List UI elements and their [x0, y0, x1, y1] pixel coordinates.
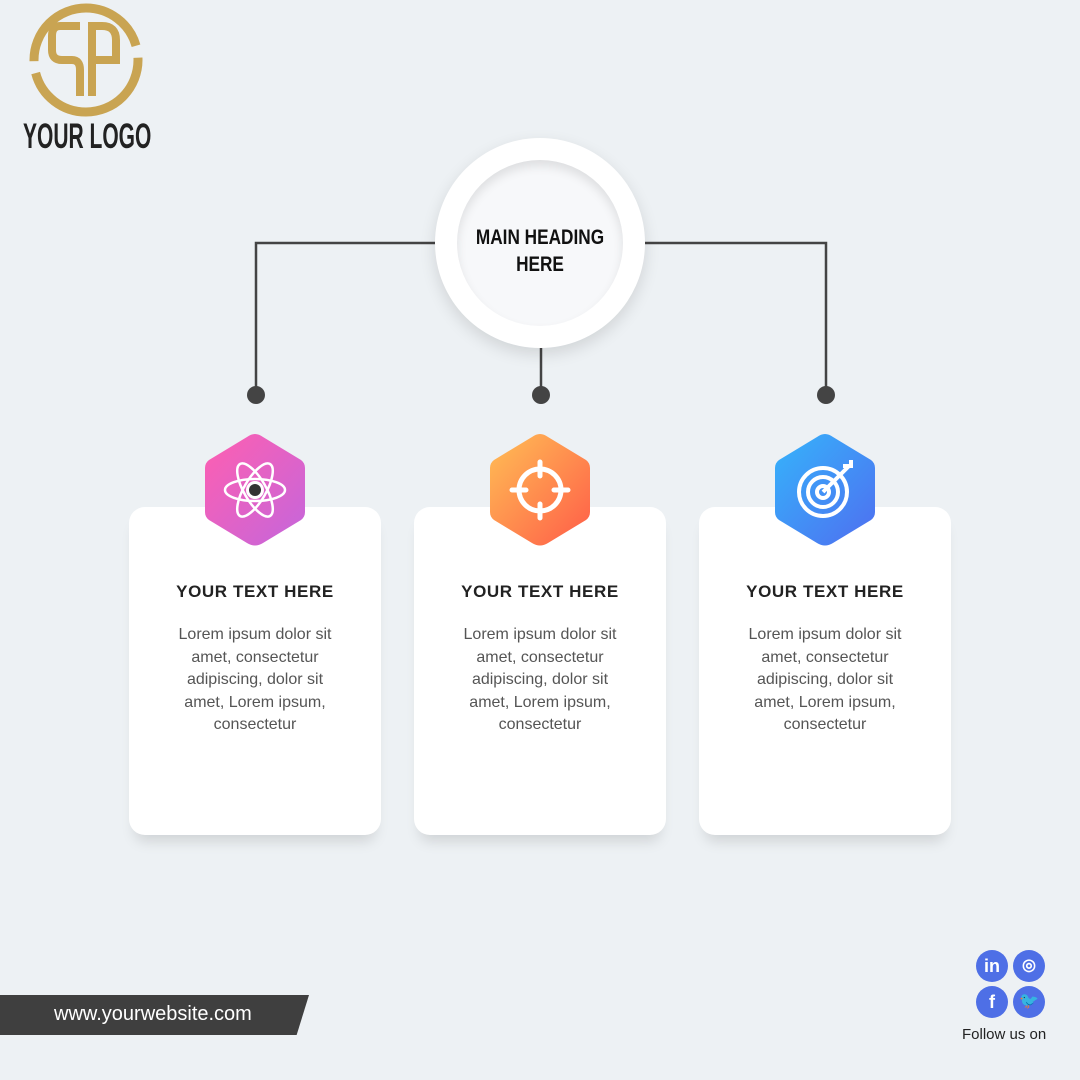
icon: atom: [205, 434, 305, 546]
card 1: [129, 507, 381, 835]
card 3: Lorem ipsum dolor sit amet, consectetur adipiscing, dolor sit amet, Lorem ipsum, consectetur: [749, 626, 901, 733]
card 2: Lorem ipsum dolor sit amet, consectetur adipiscing, dolor sit amet, Lorem ipsum, consectetur: [464, 626, 616, 733]
icon: crosshair: [490, 434, 590, 546]
social icons: Follow us on: [962, 1026, 1046, 1043]
social icons: f: [989, 992, 995, 1012]
main heading circle: [435, 138, 645, 348]
main heading circle: HERE: [516, 253, 564, 276]
card 2: [414, 507, 666, 835]
social icons: [962, 950, 1046, 1043]
card 3: [699, 507, 951, 835]
website bar: [0, 995, 309, 1035]
main heading circle: MAIN HEADING: [476, 226, 604, 249]
icon: target: [775, 434, 875, 546]
social icons: ◎: [1022, 957, 1036, 974]
social icons: 🐦: [1019, 993, 1039, 1010]
website bar: www.yourwebsite.com: [54, 1003, 252, 1025]
social icons: in: [984, 956, 1000, 976]
logo: YOUR LOGO: [23, 117, 151, 156]
card 1: Lorem ipsum dolor sit amet, consectetur adipiscing, dolor sit amet, Lorem ipsum, consectetur: [179, 626, 331, 733]
card 3: YOUR TEXT HERE: [746, 582, 904, 601]
logo: [23, 4, 151, 156]
card 2: YOUR TEXT HERE: [461, 582, 619, 601]
card 1: YOUR TEXT HERE: [176, 582, 334, 601]
connector lines: [247, 242, 835, 404]
